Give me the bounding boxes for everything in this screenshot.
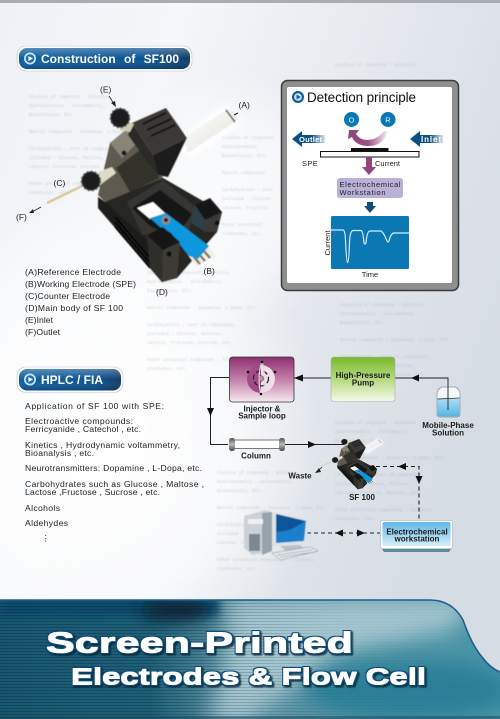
current label: Current — [375, 159, 401, 168]
faint background text: Other potential compounds : Alcohols — [217, 557, 315, 563]
faint background text: Other potential compounds : Alcohols — [335, 507, 433, 513]
bottle label — [422, 421, 474, 438]
faint background text: Neural compounds : Dopamine, L-Dopa, — [29, 129, 126, 135]
faint background text: included : Glucose, Maltose, — [340, 363, 416, 369]
parts list: (A)Reference Electrode — [25, 267, 121, 277]
faint background text: Lactose, Fructose, Sucrose, etc. — [29, 164, 115, 170]
current vs time chart: Current — [323, 230, 332, 256]
outlet arrow — [292, 131, 325, 147]
callout letters and arrows: (D) — [156, 287, 168, 297]
bottle label: Mobile-Phase — [422, 421, 474, 430]
upper black block — [128, 108, 187, 177]
faint background text: Carbohydrate : over 10 compounds, — [147, 322, 236, 328]
inlet knob — [110, 108, 134, 132]
redox curved arrow — [348, 130, 388, 146]
faint background text: Studies of compound : Kinetics, — [217, 470, 301, 476]
application list: Bioanalysis , etc. — [25, 448, 94, 458]
faint background text: Lactose, Fructose, Sucrose, etc. — [147, 340, 233, 346]
callout letters and arrows — [16, 84, 250, 297]
banner title: Screen-Printed — [46, 628, 353, 660]
parts list: (B)Working Electrode (SPE) — [25, 279, 136, 289]
faint background text: Carbohydrate : over 10 compounds, — [335, 472, 424, 478]
application list: ⋮ — [42, 533, 50, 543]
parts list: (C)Counter Electrode — [25, 291, 110, 301]
faint background text: Aldehydes, etc. — [335, 516, 376, 522]
outlet arrow: Outlet — [299, 135, 322, 144]
injector label: Sample loop — [238, 412, 286, 420]
electrochemical workstation: Electrochemical — [386, 528, 448, 536]
faint background text: Hydrodynamics — [222, 144, 257, 150]
faint background text: Studies of compound — [222, 135, 274, 141]
application list: Alcohols — [25, 503, 60, 513]
faint background text — [29, 62, 451, 572]
SF 100 label: SF 100 — [349, 493, 375, 502]
application list: Lactose ,Fructose , Sucrose , etc. — [25, 487, 160, 497]
counter electrode fitting — [47, 167, 116, 203]
faint background text: Aldehydes, etc. — [29, 190, 70, 196]
callout letters and arrows: (E) — [100, 84, 112, 94]
faint background text: included : Glucose — [222, 196, 271, 202]
panel: detection principle — [282, 80, 458, 290]
signal arrowheads — [335, 463, 422, 536]
callout letters and arrows: (A) — [238, 100, 250, 110]
callout letters and arrows: (C) — [54, 178, 65, 188]
inlet arrow: Inlet — [421, 135, 441, 144]
detection heading: Detection principle — [307, 90, 416, 105]
faint background text: Aldehydes, etc. — [147, 366, 188, 372]
faint background text: included : Glucose, Maltose, — [217, 531, 293, 537]
high-pressure pump: Pump — [352, 378, 374, 388]
faint background text: Aldehydes, etc. — [217, 566, 258, 572]
device photo: SF100 flow cell — [47, 105, 242, 282]
faint background text: included : Glucose, Maltose, — [147, 331, 223, 337]
parts list: (D)Main body of SF 100 — [25, 303, 123, 313]
application list — [25, 401, 204, 543]
faint background text: Bioanalysis, Etc. — [222, 153, 268, 159]
reference electrode barrel — [178, 105, 242, 160]
faint background text: Neural compounds : Dopamine, L-Dopa, Etc. — [335, 455, 446, 461]
application list: Carbohydrates such as Glucose , Maltose , — [25, 479, 204, 489]
heading: Construction of SF100 — [17, 46, 192, 71]
electrochemical workstation box: Workstation — [340, 188, 386, 197]
injector and sample loop — [230, 357, 294, 402]
faint background text: Hydrodynamics · voltammetry, — [340, 311, 416, 317]
banner title — [46, 628, 426, 690]
faint background text: included : Glucose, Maltose, — [335, 481, 411, 487]
front pillars — [147, 198, 222, 282]
faint background text: Lactose, Fructose, Sucrose, etc. — [335, 490, 421, 496]
faint background text: Bioanalysis, Etc. — [335, 438, 381, 444]
callout letters and arrows: (F) — [16, 212, 27, 222]
faint background text: Neural compounds : Dopamine, L-Dopa, Etc. — [147, 305, 258, 311]
faint background text: Other potential compounds — [29, 181, 97, 187]
callout letters and arrows: (B) — [204, 266, 215, 276]
application list: Aldehydes — [25, 518, 68, 528]
current vs time chart — [323, 216, 409, 279]
faint background text: Other potential compounds : Alcohols — [147, 357, 245, 363]
parts list: (F)Outlet — [25, 327, 61, 337]
reduced species R: R — [385, 116, 391, 124]
heading: HPLC / FIA: HPLC / FIA — [41, 373, 103, 387]
application list: Ferricyanide , Catechol , etc. — [25, 424, 141, 434]
mobile-phase solution bottle — [437, 381, 460, 417]
heading: Construction of SF100: Construction of SF100 — [41, 52, 179, 66]
faint background text: Aldehydes, etc. — [222, 231, 263, 237]
small SF 100 device — [321, 438, 383, 489]
faint background text: Bioanalysis, Etc. — [340, 320, 386, 326]
footer banner — [0, 598, 500, 719]
faint background text: Hydrodynamics · voltammetry, — [335, 429, 411, 435]
parts list: (E)Inlet — [25, 315, 54, 325]
dashed signal lines — [307, 466, 419, 533]
bottle label: Solution — [432, 428, 464, 438]
faint background text: Other potential — [222, 222, 263, 228]
application list: Kinetics , Hydrodynamic voltammetry, — [25, 440, 180, 450]
white label — [137, 202, 166, 219]
faint background text: Studies of compound : Kinetics, — [29, 94, 113, 100]
faint background text: Hydrodynamics · voltammetry, — [147, 279, 223, 285]
faint background text: Carbohydrate : over 10 compounds, — [340, 354, 429, 360]
faint background text: Carbohydrate : over 10 compounds, — [217, 522, 306, 528]
faint background text: Studies of compound : Kinetics, — [335, 62, 419, 68]
high-pressure pump: High-Pressure — [336, 371, 391, 380]
separation column — [229, 438, 285, 451]
computer — [244, 510, 318, 560]
flow lines — [210, 378, 448, 444]
main body — [98, 178, 222, 282]
oxidised species O — [344, 112, 359, 127]
SPE contacts — [188, 245, 215, 267]
faint background text: Lactose, Fructose, Sucrose, etc. — [217, 540, 303, 546]
faint background text: Neural compounds : Dopamine, L-Dopa, Etc. — [340, 337, 451, 343]
application list: Electroactive compounds: — [25, 416, 133, 426]
electrochemical workstation box: Electrochemical — [340, 180, 401, 189]
faint background text: included : Glucose, Maltose, — [29, 155, 105, 161]
injector label — [238, 404, 286, 420]
flow arrowheads — [207, 374, 419, 448]
oxidised species O: O — [349, 116, 355, 124]
SPE blue strip — [150, 213, 209, 259]
current vs time chart: Time — [362, 270, 378, 279]
SPE electrode bar — [320, 148, 419, 157]
faint background text: Bioanalysis, Etc. — [147, 288, 193, 294]
SPE label: SPE — [302, 159, 318, 168]
metal plate — [98, 125, 163, 202]
waste label: Waste — [288, 472, 312, 480]
faint background text: Bioanalysis, Etc. — [29, 112, 75, 118]
injector label: Injector & — [244, 404, 281, 414]
application list: Neurotransmitters: Dopamine , L-Dopa, etc. — [25, 463, 202, 473]
down arrow — [364, 202, 376, 213]
application list: Application of SF 100 with SPE: — [25, 401, 164, 411]
column label: Column — [241, 452, 271, 460]
electrochemical workstation — [380, 520, 452, 552]
faint background text: Hydrodynamics · voltammetry, — [217, 479, 293, 485]
inlet arrow — [410, 131, 443, 147]
faint background text: Carbohydrate : over — [222, 187, 274, 193]
faint background text: Analysis of compound, Kinetics, — [147, 270, 231, 276]
heading: HPLC / FIA — [17, 367, 123, 392]
faint background text: Neural compounds : Dopamine, L-Dopa, Etc. — [217, 505, 328, 511]
electrochemical workstation box — [337, 178, 403, 198]
electrochemical workstation: workstation — [394, 534, 440, 544]
high-pressure pump — [331, 357, 395, 402]
current arrow — [362, 157, 376, 175]
faint background text: Studies of compound : Kinetics, — [335, 420, 419, 426]
faint background text: Lactose, Fructose — [222, 205, 268, 211]
faint background text: Lactose, Fructose, Sucrose, etc. — [340, 372, 426, 378]
faint background text: Analysis of compound : Kinetics, — [340, 302, 426, 308]
faint background text: Neural compounds — [222, 170, 266, 176]
waste line — [315, 467, 322, 473]
faint background text: Carbohydrate : over 10 compounds, — [29, 146, 118, 152]
faint background text: Hydrodynamics · voltammetry, — [29, 103, 105, 109]
faint background text: Bioanalysis, Etc. — [217, 488, 263, 494]
banner title: Electrodes & Flow Cell — [71, 664, 426, 690]
reduced species R — [380, 112, 396, 127]
parts list — [25, 267, 136, 337]
